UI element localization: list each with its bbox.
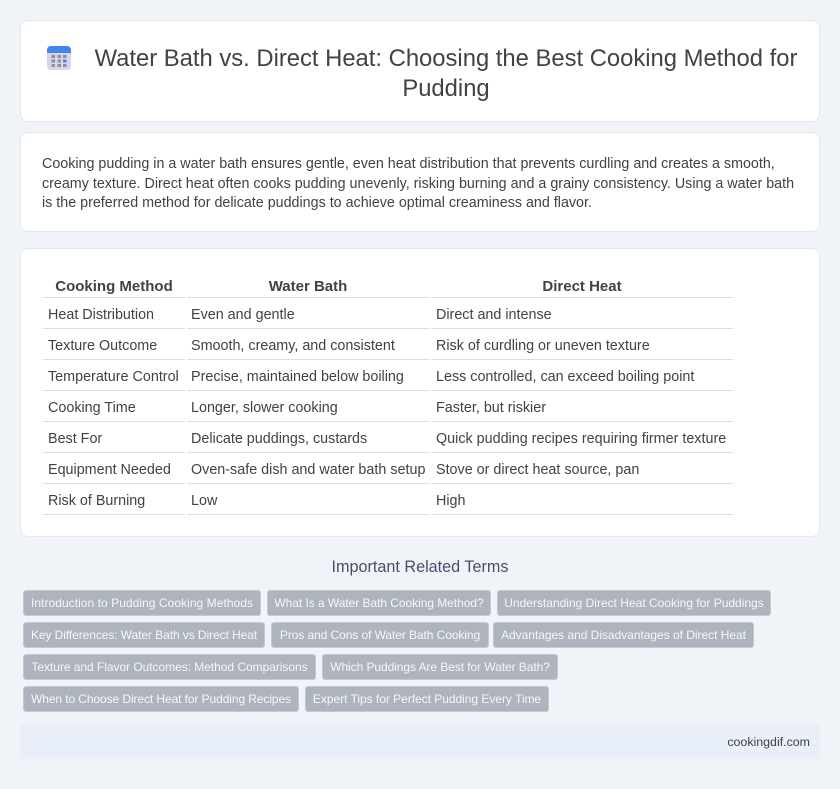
table rows: Faster, but riskier bbox=[436, 400, 546, 416]
panel: header bbox=[20, 20, 820, 122]
table header: Cooking Method bbox=[55, 278, 173, 295]
table rows: Heat Distribution bbox=[48, 307, 154, 323]
table rows bbox=[43, 297, 733, 515]
table rows: Cooking Time bbox=[48, 400, 136, 416]
table rows: High bbox=[436, 493, 466, 509]
related term tags: Introduction to Pudding Cooking Methods bbox=[31, 596, 253, 610]
footer source label: cookingdif.com bbox=[727, 735, 810, 749]
related term tags: When to Choose Direct Heat for Pudding Recipes bbox=[31, 692, 291, 706]
table rows: Risk of curdling or uneven texture bbox=[436, 338, 650, 354]
intro paragraph: Cooking pudding in a water bath ensures gentle, even heat distribution that prevents curdling and creates a smooth, bbox=[42, 156, 775, 172]
table rows: Smooth, creamy, and consistent bbox=[191, 338, 395, 354]
table rows: Risk of Burning bbox=[48, 493, 145, 509]
panel: comparison table bbox=[20, 248, 820, 537]
table rows: Direct and intense bbox=[436, 307, 552, 323]
table header bbox=[55, 278, 622, 295]
table rows: Texture Outcome bbox=[48, 338, 157, 354]
intro paragraph bbox=[42, 156, 794, 211]
title: Pudding bbox=[402, 74, 490, 102]
title: Water Bath vs. Direct Heat: Choosing the Best Cooking Method for bbox=[95, 45, 797, 72]
related term tags: Pros and Cons of Water Bath Cooking bbox=[280, 628, 480, 642]
table rows: Oven-safe dish and water bath setup bbox=[191, 462, 425, 478]
table rows: Delicate puddings, custards bbox=[191, 431, 367, 447]
table rows: Stove or direct heat source, pan bbox=[436, 462, 639, 478]
intro paragraph: is the preferred method for delicate puddings to achieve optimal creaminess and flavor. bbox=[42, 195, 592, 211]
panel: intro text bbox=[20, 132, 820, 232]
table rows: Precise, maintained below boiling bbox=[191, 369, 404, 385]
table rows: Equipment Needed bbox=[48, 462, 171, 478]
icon: calendar bbox=[47, 46, 71, 70]
table rows: Quick pudding recipes requiring firmer texture bbox=[436, 431, 726, 447]
table header: Water Bath bbox=[269, 278, 347, 295]
table header: Direct Heat bbox=[542, 278, 622, 295]
table rows: Longer, slower cooking bbox=[191, 400, 338, 416]
table rows: Best For bbox=[48, 431, 102, 447]
table rows: Less controlled, can exceed boiling point bbox=[436, 369, 694, 385]
related term tags: What Is a Water Bath Cooking Method? bbox=[274, 596, 484, 610]
related term tags: Texture and Flavor Outcomes: Method Comparisons bbox=[31, 660, 308, 674]
title bbox=[94, 45, 798, 102]
table rows: Temperature Control bbox=[48, 369, 179, 385]
related term tags: Advantages and Disadvantages of Direct Heat bbox=[501, 628, 746, 642]
related term tags: Understanding Direct Heat Cooking for Puddings bbox=[504, 596, 764, 610]
intro paragraph: creamy texture. Direct heat often cooks pudding unevenly, risking burning and a grainy consistency. Using a water bath bbox=[42, 176, 794, 192]
heading: related terms: Important Related Terms bbox=[332, 558, 508, 576]
related term tags: Which Puddings Are Best for Water Bath? bbox=[330, 660, 550, 674]
table rows: Low bbox=[191, 493, 217, 509]
related term tags bbox=[23, 590, 771, 712]
table rows: Even and gentle bbox=[191, 307, 295, 323]
footer bbox=[20, 725, 820, 759]
related term tags: Expert Tips for Perfect Pudding Every Time bbox=[313, 692, 541, 706]
related term tags: Key Differences: Water Bath vs Direct Heat bbox=[31, 628, 257, 642]
